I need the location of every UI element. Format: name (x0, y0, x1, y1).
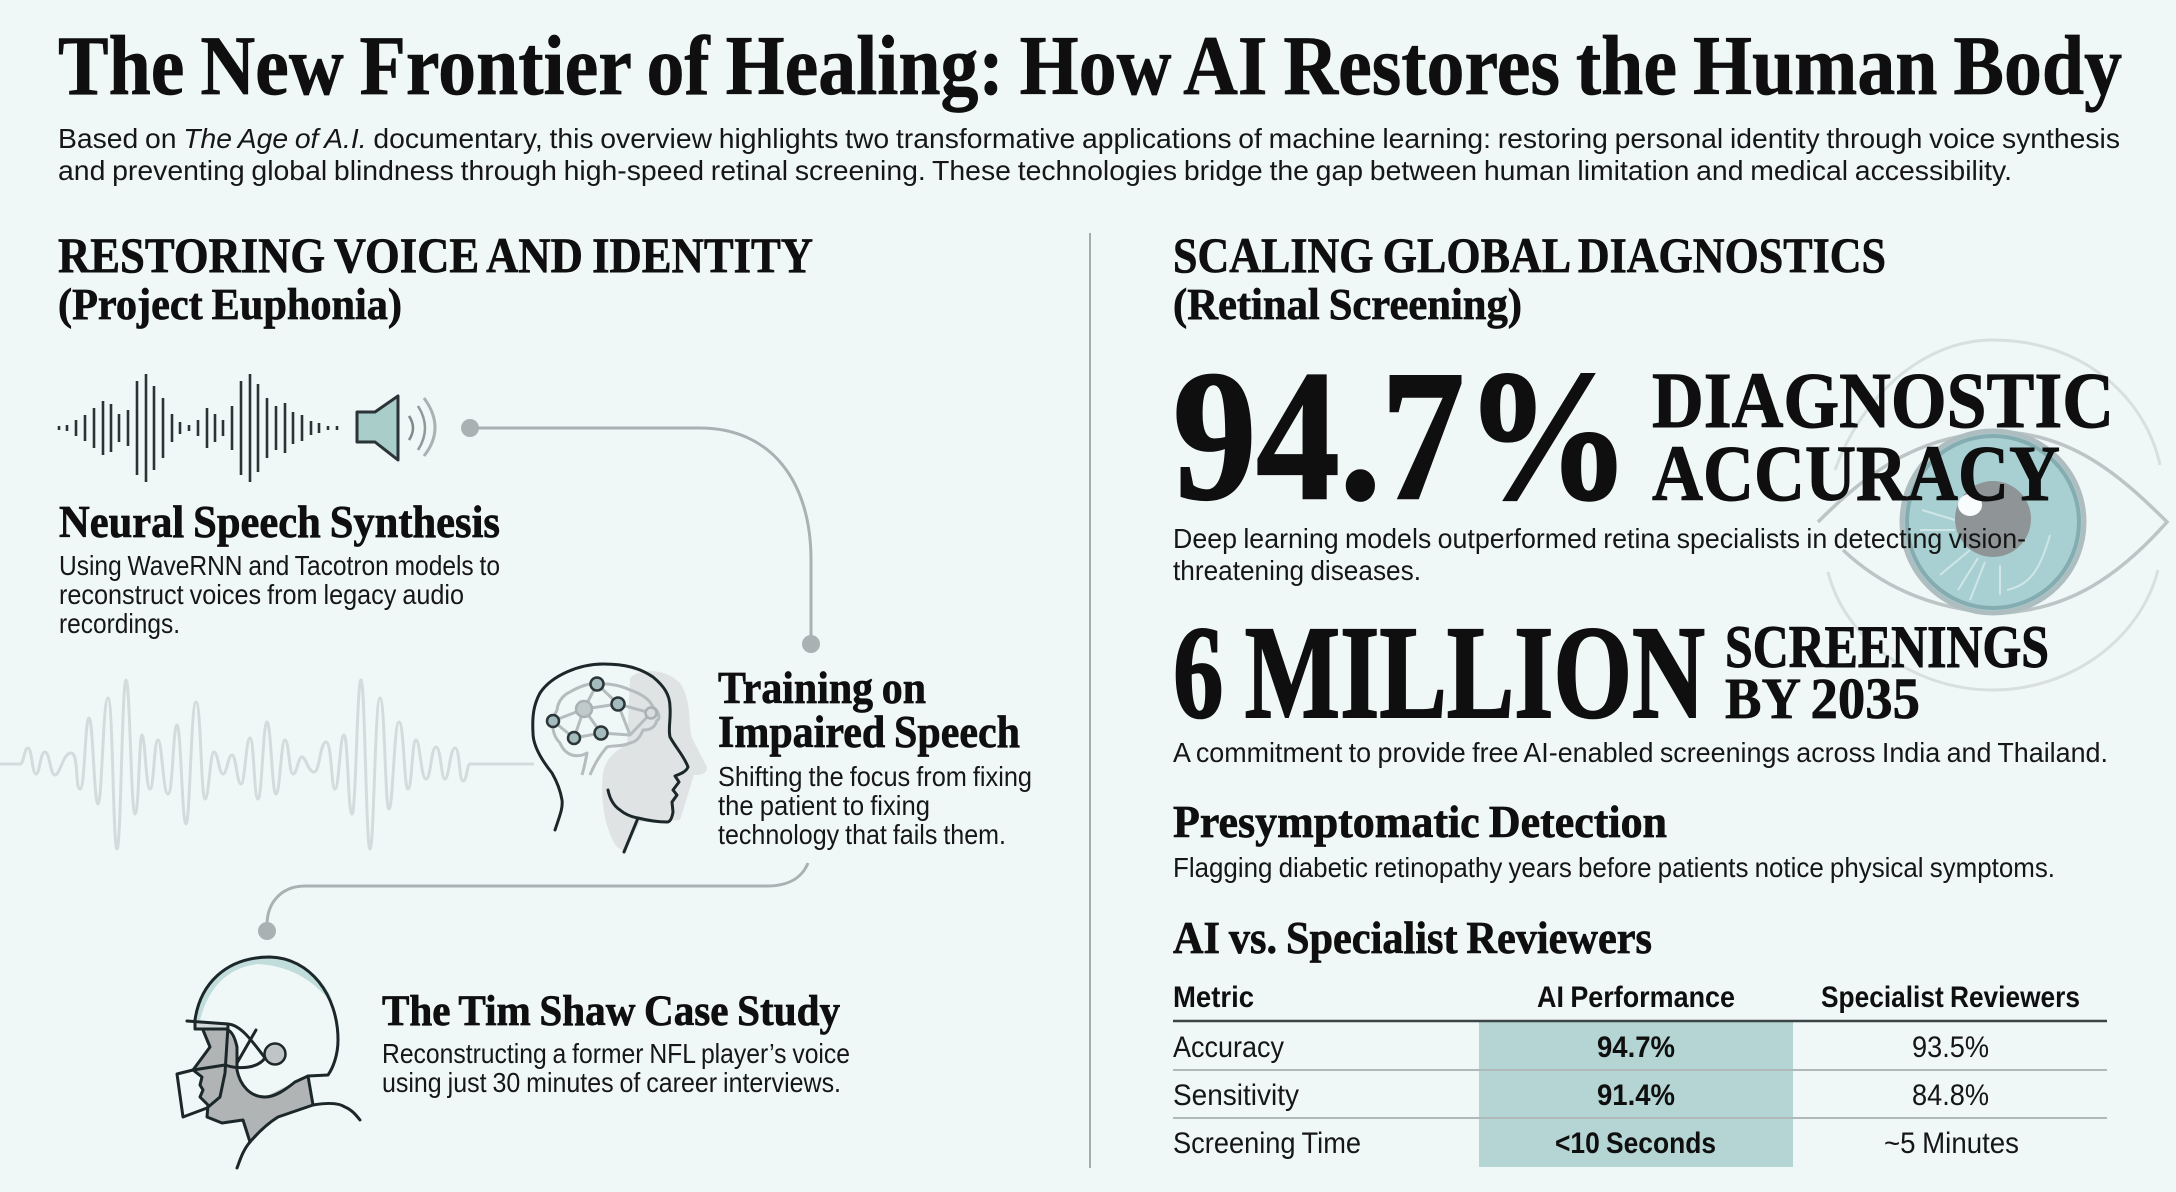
panel: restoring voice and identity (0, 227, 1032, 1168)
row: screening time: Screening Time (1173, 1127, 1361, 1160)
row: accuracy: 93.5% (1912, 1031, 1989, 1064)
stat: 94.7% diagnostic accuracy: Deep learning models outperformed retina specialists in detecting vision- (1173, 523, 2026, 554)
intro text (58, 123, 2120, 186)
row: sensitivity (1173, 1079, 1989, 1112)
text: tim shaw case study: using just 30 minutes of career interviews. (382, 1067, 841, 1098)
intro text: and preventing global blindness through high-speed retinal screening. These technologies bridge the gap between human limitation and medical accessibility. (58, 155, 2012, 186)
stat: 6 million screenings: SCREENINGS (1725, 614, 2049, 680)
text: neural speech synthesis: Using WaveRNN and Tacotron models to (59, 550, 500, 581)
text: tim shaw case study (382, 988, 850, 1098)
row: screening time: <10 Seconds (1555, 1127, 1716, 1160)
text: tim shaw case study: Reconstructing a former NFL player’s voice (382, 1038, 850, 1069)
stat: 94.7% diagnostic accuracy: threatening diseases. (1173, 555, 1421, 586)
stat: 94.7% diagnostic accuracy: ACCURACY (1652, 431, 2060, 518)
text: training on impaired speech: technology that fails them. (718, 819, 1006, 850)
heading: scaling diagnostics (1173, 227, 1886, 329)
comparison table (1173, 912, 2107, 1167)
text: training on impaired speech: Training on (718, 663, 926, 713)
table title: AI vs. Specialist Reviewers (1173, 912, 1652, 963)
stat: 6 million screenings: A commitment to provide free AI-enabled screenings across India and Thailand. (1173, 737, 2108, 768)
text: neural speech synthesis: Neural Speech Synthesis (59, 497, 500, 547)
row: screening time: ~5 Minutes (1884, 1127, 2019, 1160)
table header row: Metric (1173, 981, 1254, 1014)
arrow: training to case study (258, 863, 808, 940)
heading: restoring voice (58, 227, 813, 329)
icon: head with neural network (533, 664, 707, 852)
text: presymptomatic detection (1173, 797, 2055, 883)
stat: 6 million screenings (1173, 598, 2108, 768)
table header row: Specialist Reviewers (1821, 981, 2080, 1014)
text: presymptomatic detection: Flagging diabetic retinopathy years before patients notice physical symptoms. (1173, 852, 2055, 883)
icon: speaker (357, 396, 435, 460)
panel: scaling global diagnostics (1173, 227, 2167, 1167)
stat: 94.7% diagnostic accuracy: DIAGNOSTIC (1652, 358, 2114, 445)
stat: 6 million screenings: BY 2035 (1725, 666, 1920, 731)
icon: speech waveform (59, 374, 337, 482)
text: training on impaired speech (718, 663, 1032, 850)
text: neural speech synthesis: recordings. (59, 608, 180, 639)
stat: 94.7% diagnostic accuracy: 94.7% (1173, 333, 1631, 539)
text: training on impaired speech: Shifting the focus from fixing (718, 761, 1032, 792)
text: neural speech synthesis: reconstruct voices from legacy audio (59, 579, 464, 610)
arrow: speech to training (461, 419, 820, 653)
intro text: Based on The Age of A.I. documentary, this overview highlights two transformative applications of machine learning: restoring personal identity through voice synthesis (58, 123, 2120, 154)
row: sensitivity: 91.4% (1597, 1079, 1675, 1112)
faint waveform (0, 680, 534, 849)
text: training on impaired speech: Impaired Speech (718, 707, 1020, 757)
row: accuracy: 94.7% (1597, 1031, 1675, 1064)
icon: football helmet (177, 957, 360, 1168)
row: screening time (1173, 1127, 2019, 1160)
stat: 6 million screenings: 6 MILLION (1173, 598, 1705, 746)
heading: scaling diagnostics: (Retinal Screening) (1173, 280, 1522, 329)
icon: eye illustration (1818, 340, 2167, 690)
row: sensitivity: Sensitivity (1173, 1079, 1299, 1112)
text: presymptomatic detection: Presymptomatic Detection (1173, 797, 1667, 847)
heading: restoring voice: RESTORING VOICE AND IDENTITY (58, 227, 813, 283)
heading: restoring voice: (Project Euphonia) (58, 280, 402, 329)
text: training on impaired speech: the patient to fixing (718, 790, 930, 821)
stat: 94.7% diagnostic accuracy (1173, 333, 2114, 586)
table header row: AI Performance (1537, 981, 1735, 1014)
row: accuracy: Accuracy (1173, 1031, 1284, 1064)
text: tim shaw case study: The Tim Shaw Case Study (382, 988, 840, 1035)
row: sensitivity: 84.8% (1912, 1079, 1989, 1112)
text: neural speech synthesis (59, 497, 500, 639)
table header row (1173, 981, 2080, 1014)
heading: scaling diagnostics: SCALING GLOBAL DIAGNOSTICS (1173, 227, 1886, 283)
row: accuracy (1173, 1031, 1989, 1064)
